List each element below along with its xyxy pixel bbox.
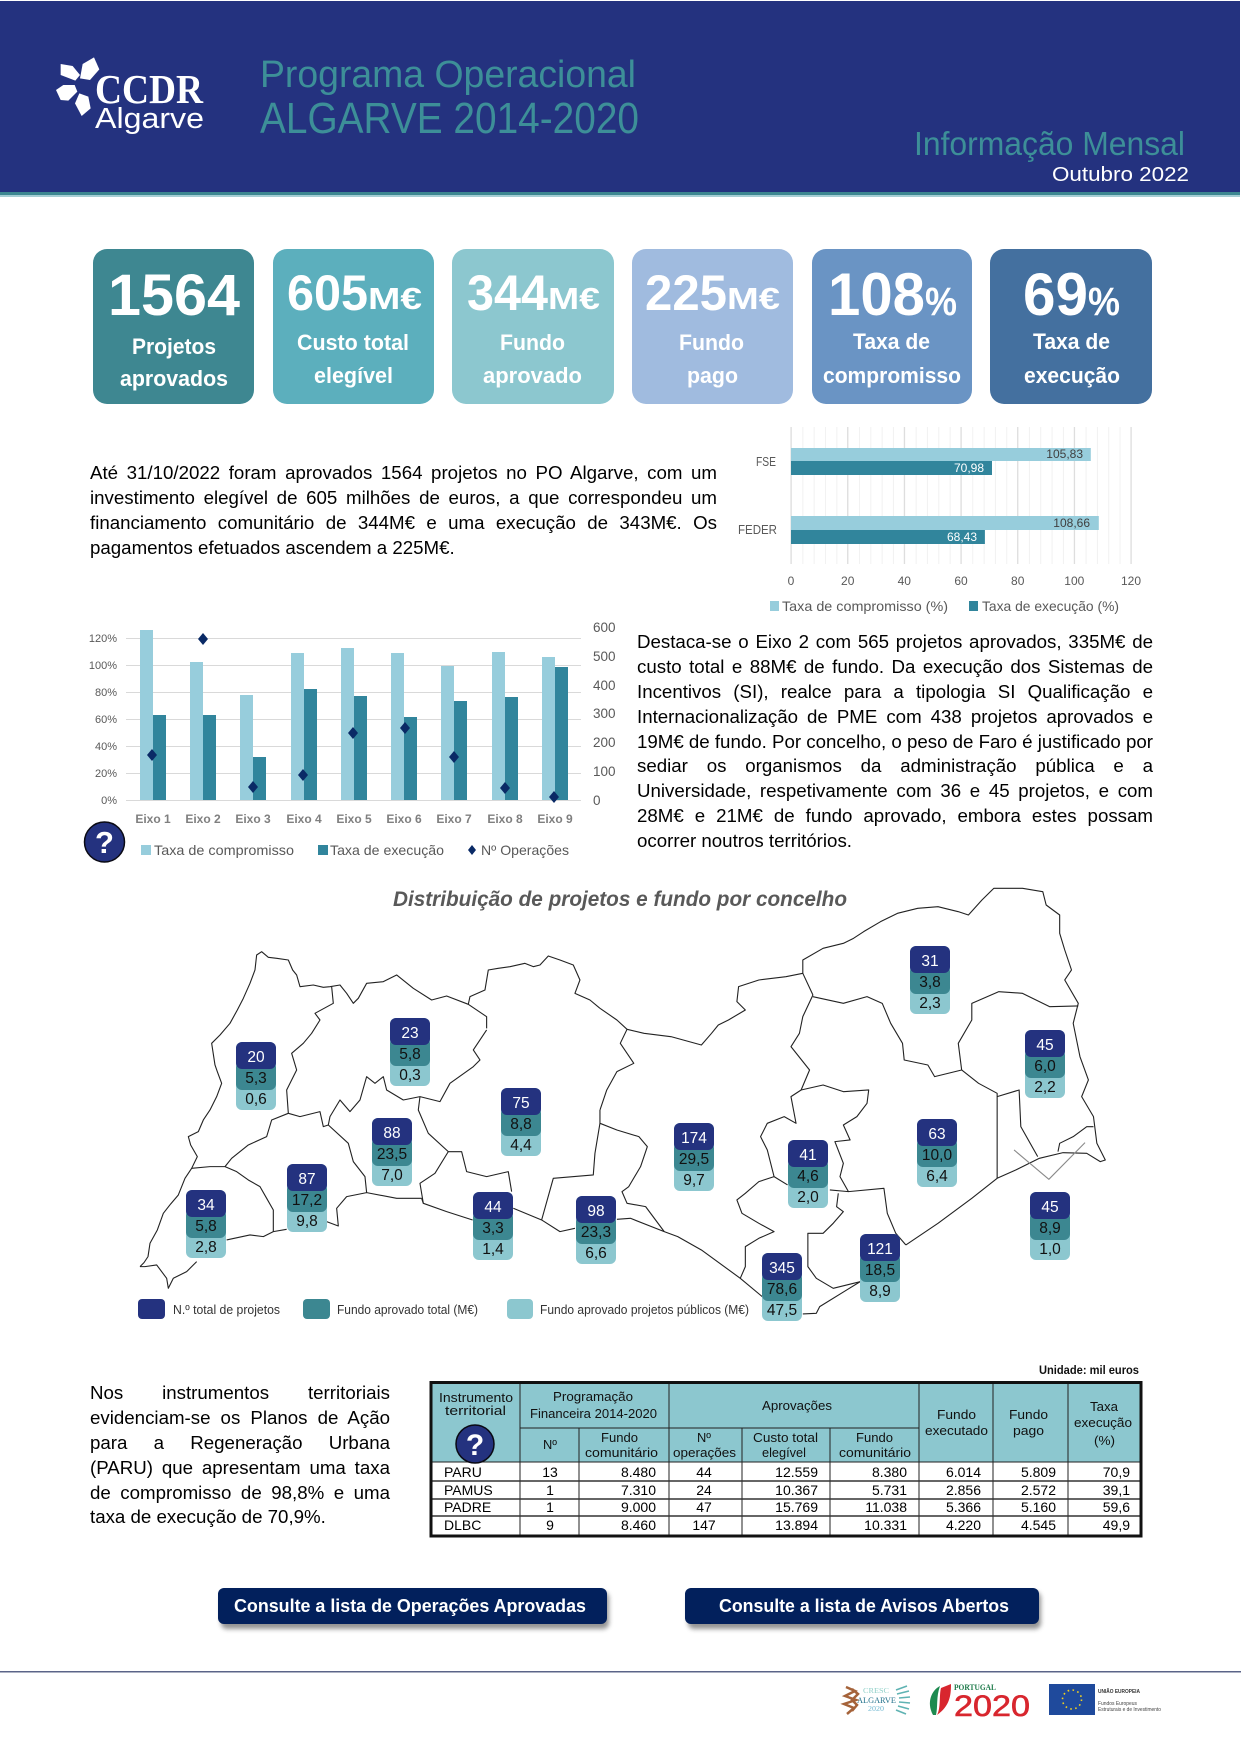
stack: 87: 9,8 [296, 1213, 318, 1230]
stack: 98: 98 [587, 1203, 605, 1220]
table row: PAMUS: 7.310 [621, 1482, 656, 1498]
footer logo: União Europeia [1049, 1684, 1161, 1715]
footer logo: Portugal 2020 [930, 1683, 1030, 1723]
card: taxa de execução: Taxa de [1033, 329, 1110, 354]
stack: 87 [287, 1164, 327, 1232]
category labels: Eixo 3 [235, 812, 271, 826]
stack: 23 [390, 1018, 430, 1086]
bars: FSE: 105,83 [1046, 447, 1083, 461]
table row: PARU: 8.480 [621, 1464, 656, 1480]
category labels: Eixo 5 [336, 812, 372, 826]
legend: Taxa de execução [330, 842, 444, 858]
table header: Financeira 2014-2020 [530, 1407, 657, 1421]
stack: 75: 75 [512, 1095, 530, 1112]
left axis: 20% [95, 768, 117, 780]
category labels: Eixo 6 [386, 812, 422, 826]
left axis: 80% [95, 687, 117, 699]
stack: 44: 3,3 [482, 1220, 504, 1237]
bars: FEDER: 68,43 [947, 530, 977, 544]
table header: comunitário [585, 1446, 658, 1460]
stack: 45 east: 2,2 [1034, 1079, 1056, 1096]
card: custo total elegível: elegível [314, 363, 393, 388]
stack: 23: 0,3 [399, 1067, 421, 1084]
category labels: Eixo 4 [286, 812, 322, 826]
card: fundo aprovado: M€ [548, 281, 600, 316]
table row: PADRE: 9.000 [621, 1499, 656, 1515]
stack: 98: 6,6 [585, 1245, 607, 1262]
text block: territorial instruments paragraph: Nos instrumentos territoriais [90, 1382, 390, 1403]
icon: question mark [84, 822, 124, 862]
stack: 63: 6,4 [926, 1168, 948, 1185]
legend [770, 598, 1119, 614]
table row: PAMUS: 2.856 [946, 1482, 981, 1498]
card: fundo pago: Fundo [679, 330, 744, 355]
heading: map title: Distribuição de projetos e fundo por concelho [393, 888, 847, 911]
table header: Fundo [937, 1408, 976, 1422]
table row: PADRE: 15.769 [775, 1499, 818, 1515]
right axis: 300 [593, 706, 616, 721]
stack: 34: 5,8 [195, 1218, 217, 1235]
table row: PARU: 12.559 [775, 1464, 818, 1480]
stack: 87: 87 [298, 1171, 316, 1188]
table header: Custo total [753, 1431, 818, 1445]
icon: CCDR Algarve logo: Algarve [95, 103, 204, 135]
stack: 174 [674, 1123, 714, 1191]
stack: 87: 17,2 [292, 1192, 322, 1209]
stack: 23: 23 [401, 1025, 419, 1042]
stack: 45 east [1025, 1030, 1065, 1098]
table row: PAMUS [444, 1482, 1130, 1498]
table header: Taxa [1090, 1400, 1118, 1414]
card: taxa de compromisso: Taxa de [853, 329, 930, 354]
text block: territorial instruments paragraph: para a Regeneração Urbana [90, 1432, 390, 1453]
icon: CCDR Algarve logo: CCDR [95, 66, 203, 112]
table row: PAMUS: 1 [546, 1482, 554, 1498]
card: taxa de execução: execução [1024, 363, 1120, 388]
axis labels: 60 [954, 574, 968, 588]
table row: PADRE: 59,6 [1103, 1499, 1130, 1515]
table row: PAMUS: 10.367 [775, 1482, 818, 1498]
text block: intro paragraph: financiamento comunitário de 344M€ e uma execução de 343M€. Os [90, 512, 717, 533]
card: taxa de compromisso [812, 249, 972, 404]
right axis: 500 [593, 649, 616, 664]
table header: Nº [543, 1438, 557, 1452]
card: taxa de execução: 69 [1023, 261, 1088, 328]
table header: Nº [697, 1431, 711, 1445]
stack: 63 [917, 1119, 957, 1187]
card: fundo pago: M€ [727, 281, 780, 316]
table row: PAMUS: 2.572 [1021, 1482, 1056, 1498]
stack: 20 [236, 1042, 276, 1110]
stack: 45 south [1030, 1192, 1070, 1260]
card: taxa de compromisso: 108 [828, 261, 925, 328]
table row: PAMUS: 39,1 [1103, 1482, 1130, 1498]
stack: 98: 23,3 [581, 1224, 611, 1241]
left axis: 0% [101, 795, 117, 807]
button: avisos abertos [685, 1588, 1041, 1629]
stack: 88: 23,5 [377, 1146, 407, 1163]
stack: 20: 0,6 [245, 1091, 267, 1108]
table header: executado [925, 1424, 988, 1438]
stack: 75: 8,8 [510, 1116, 532, 1133]
table row: DLBC: 9 [546, 1517, 554, 1533]
text block: territorial instruments paragraph: (PARU) que apresentam uma taxa [90, 1457, 390, 1478]
card: custo total elegível [273, 249, 434, 404]
stack: 174: 174 [681, 1130, 707, 1147]
stack: 45 east: 6,0 [1034, 1058, 1056, 1075]
category labels: Eixo 1 [135, 812, 171, 826]
text block: Eixo 2 highlight paragraph: Universidade, respetivamente com 36 e 45 projetos, e com [637, 780, 1153, 801]
panel: KPI cards [93, 249, 1152, 404]
card: fundo pago: pago [687, 363, 738, 388]
axis labels: 80 [1011, 574, 1025, 588]
card: projetos aprovados: Projetos [132, 334, 216, 359]
table row: DLBC: DLBC [444, 1517, 481, 1533]
text block: Eixo 2 highlight paragraph: Destaca-se o Eixo 2 com 565 projetos aprovados, 335M€ de [637, 631, 1153, 652]
table row: DLBC: 49,9 [1103, 1517, 1130, 1533]
map: Algarve municipalities [140, 888, 1105, 1314]
category labels: Eixo 8 [487, 812, 523, 826]
table header: Fundo [1009, 1408, 1048, 1422]
table row: PARU: 5.809 [1021, 1464, 1056, 1480]
table row: PARU: 70,9 [1103, 1464, 1130, 1480]
button: operações aprovadas: Consulte a lista de Operações Aprovadas [234, 1596, 586, 1616]
text block: territorial instruments paragraph [90, 1382, 390, 1527]
footer logo: Portugal 2020: PORTUGAL [954, 1683, 996, 1692]
stack: 345 [762, 1253, 802, 1321]
table row: PAMUS: 24 [696, 1482, 712, 1498]
bars: FEDER: 108,66 [1053, 516, 1090, 530]
footer logo: Cresc Algarve 2020 [844, 1686, 910, 1714]
icon: question mark: ? [95, 825, 114, 860]
table header: operações [673, 1446, 736, 1460]
text block: Eixo 2 highlight paragraph [637, 631, 1154, 851]
bar chart: taxa de compromisso e execução por fundo [738, 427, 1141, 614]
table header: comunitário [839, 1446, 911, 1460]
category labels [135, 812, 573, 826]
stack: 31: 2,3 [919, 995, 941, 1012]
footer logo: União Europeia: Fundos Europeus [1098, 1701, 1137, 1707]
stack: 20: 5,3 [245, 1070, 267, 1087]
map legend: Fundo aprovado projetos públicos (M€) [540, 1302, 749, 1317]
map legend [138, 1299, 749, 1319]
stack: 23: 5,8 [399, 1046, 421, 1063]
button: operações aprovadas [218, 1588, 609, 1629]
table header: Programação [553, 1390, 633, 1404]
bars: taxa de execução [153, 667, 568, 800]
stack: 121 [860, 1234, 900, 1302]
left axis: 120% [89, 633, 117, 645]
axis labels: 100 [1064, 574, 1085, 588]
text block: intro paragraph [90, 462, 717, 558]
category labels: Eixo 9 [537, 812, 573, 826]
card: taxa de execução: % [1088, 280, 1120, 324]
footer logo: Cresc Algarve 2020: ALGARVE [857, 1696, 896, 1705]
markers: nº operações [147, 633, 559, 803]
stack: 88 [372, 1118, 412, 1186]
table row: DLBC [444, 1517, 1130, 1533]
text block: intro paragraph: Até 31/10/2022 foram aprovados 1564 projetos no PO Algarve, com um [90, 462, 717, 483]
right axis [593, 620, 616, 808]
stack: 41 [788, 1140, 828, 1208]
axis labels: 20 [841, 574, 855, 588]
text block: Eixo 2 highlight paragraph: ocorrer noutros territórios. [637, 830, 852, 851]
stack: 45 south: 1,0 [1039, 1241, 1061, 1258]
table header: Aprovações [762, 1399, 832, 1413]
left axis: 100% [89, 660, 117, 672]
bars: FEDER [791, 516, 1099, 544]
stack: 45 south: 45 [1041, 1199, 1059, 1216]
table: territorial instruments [431, 1382, 1141, 1536]
left axis [89, 633, 117, 807]
legend [141, 842, 569, 858]
text block: Eixo 2 highlight paragraph: Internacionalização de PME com 438 projetos aprovados e [637, 706, 1153, 727]
stack: 41: 41 [799, 1147, 817, 1164]
stack: 34: 34 [197, 1197, 215, 1214]
table header: Fundo [856, 1431, 893, 1445]
text block: Eixo 2 highlight paragraph: 28M€ e 21M€ de fundo aprovado, embora estes possam [637, 805, 1153, 826]
table header: (%) [1094, 1434, 1115, 1448]
stack: 75: 4,4 [510, 1137, 532, 1154]
stack: 345: 47,5 [767, 1302, 797, 1319]
title [260, 54, 639, 143]
table row: PADRE: 5.160 [1021, 1499, 1056, 1515]
footer rule [0, 1671, 1241, 1672]
card: taxa de compromisso: % [925, 280, 957, 324]
stack: 345: 345 [769, 1260, 795, 1277]
stack: 98 [576, 1196, 616, 1264]
stack: 121: 121 [867, 1241, 893, 1258]
header banner [0, 1, 1240, 197]
bars: FSE [791, 447, 1091, 475]
left axis: 60% [95, 714, 117, 726]
stack: 31: 3,8 [919, 974, 941, 991]
table row: DLBC: 10.331 [864, 1517, 907, 1533]
table row: DLBC: 4.220 [946, 1517, 981, 1533]
map data stacks [186, 946, 1070, 1321]
stack: 31 [910, 946, 950, 1014]
axis labels [738, 454, 1141, 588]
table row: PAMUS: PAMUS [444, 1482, 493, 1498]
table row: PARU [444, 1464, 1130, 1480]
table row: PADRE: 1 [546, 1499, 554, 1515]
card: taxa de execução [990, 249, 1152, 404]
legend: Taxa de compromisso (%) [782, 598, 948, 614]
text block: Eixo 2 highlight paragraph: Incentivos (SI), realce para a tipologia SI Qualificação e [637, 681, 1153, 702]
text block: Eixo 2 highlight paragraph: sediar os organismos da administração pública e a [637, 755, 1153, 776]
table row: PARU: 13 [542, 1464, 558, 1480]
map legend: N.º total de projetos [173, 1302, 280, 1317]
stack: 88: 88 [383, 1125, 401, 1142]
stack: 45 east: 45 [1036, 1037, 1054, 1054]
right axis: 400 [593, 678, 616, 693]
bars: taxa de compromisso [140, 630, 555, 800]
footer logo: Cresc Algarve 2020: 2020 [868, 1705, 885, 1713]
card: fundo pago: 225 [645, 265, 727, 321]
right axis: 100 [593, 764, 616, 779]
stack: 121: 18,5 [865, 1262, 895, 1279]
table row: DLBC: 147 [692, 1517, 716, 1533]
table header: elegível [762, 1446, 806, 1460]
text block: territorial instruments paragraph: de compromisso de 98,8% e uma [90, 1482, 390, 1503]
table row: PADRE: 47 [696, 1499, 712, 1515]
axis labels: FEDER [738, 522, 777, 537]
stack: 44 [473, 1192, 513, 1260]
text block: territorial instruments paragraph: evidenciam-se os Planos de Ação [90, 1407, 390, 1428]
table row: PADRE: 11.038 [865, 1499, 907, 1515]
axis labels: 40 [898, 574, 911, 588]
card: fundo aprovado [452, 249, 614, 404]
stack: 174: 29,5 [679, 1151, 709, 1168]
table row: DLBC: 13.894 [775, 1517, 818, 1533]
stack: 174: 9,7 [683, 1172, 705, 1189]
right axis: 600 [593, 620, 616, 635]
right axis: 0 [593, 793, 601, 808]
icon: question mark [456, 1425, 494, 1463]
stack: 34 [186, 1190, 226, 1258]
subtitle: monthly information: Outubro 2022 [1052, 164, 1189, 186]
stack: 121: 8,9 [869, 1283, 891, 1300]
stack: 75 [501, 1088, 541, 1156]
card: fundo aprovado: 344 [467, 265, 548, 321]
text block: Eixo 2 highlight paragraph: custo total e 88M€ de fundo. Da execução dos Sistemas de [637, 656, 1153, 677]
text block: intro paragraph: investimento elegível de 605 milhões de euros, a que correspondeu um [90, 487, 717, 508]
footer logo: Cresc Algarve 2020: CRESC [863, 1687, 889, 1695]
unit note: Unidade: mil euros [1039, 1365, 1139, 1377]
stack: 88: 7,0 [381, 1167, 403, 1184]
table row: PADRE: PADRE [444, 1499, 491, 1515]
card: fundo pago [632, 249, 793, 404]
table header [439, 1390, 1132, 1460]
button: avisos abertos: Consulte a lista de Avisos Abertos [719, 1596, 1009, 1616]
category labels: Eixo 2 [185, 812, 221, 826]
text block: territorial instruments paragraph: taxa de execução de 70,9%. [90, 1506, 326, 1527]
table row: PARU: 6.014 [946, 1464, 981, 1480]
table header: execução [1074, 1416, 1132, 1430]
stack: 63: 10,0 [922, 1147, 952, 1164]
category labels: Eixo 7 [436, 812, 472, 826]
table header: pago [1013, 1424, 1044, 1438]
table row: DLBC: 8.460 [621, 1517, 656, 1533]
stack: 345: 78,6 [767, 1281, 797, 1298]
card: custo total elegível: 605 [287, 265, 368, 321]
stack: 44: 1,4 [482, 1241, 504, 1258]
table row: PARU: PARU [444, 1464, 482, 1480]
card: projetos aprovados: aprovados [120, 366, 228, 391]
stack: 63: 63 [928, 1126, 946, 1143]
card: fundo aprovado: aprovado [483, 363, 582, 388]
card: custo total elegível: Custo total [297, 330, 409, 355]
text block: Eixo 2 highlight paragraph: 19M€ de fundo. Por concelho, o peso de Faro é justificado por [637, 731, 1153, 752]
table header: territorial [445, 1404, 506, 1418]
right axis: 200 [593, 735, 616, 750]
subtitle: monthly information [914, 125, 1189, 186]
stack: 20: 20 [247, 1049, 265, 1066]
stack: 41: 4,6 [797, 1168, 819, 1185]
legend: Taxa de execução (%) [982, 598, 1119, 614]
text block: intro paragraph: pagamentos efetuados ascendem a 225M€. [90, 537, 455, 558]
legend: Taxa de compromisso [154, 842, 294, 858]
map legend: Fundo aprovado total (M€) [337, 1302, 478, 1317]
stack: 34: 2,8 [195, 1239, 217, 1256]
table row: DLBC: 4.545 [1021, 1517, 1056, 1533]
stack: 45 south: 8,9 [1039, 1220, 1061, 1237]
card: taxa de compromisso: compromisso [823, 363, 961, 388]
combo chart: eixos [84, 620, 616, 862]
table row: PARU: 44 [696, 1464, 712, 1480]
title: Programa Operacional [260, 54, 636, 96]
table header: Fundo [601, 1431, 638, 1445]
table header: Instrumento [439, 1391, 513, 1405]
axis labels: 0 [788, 574, 795, 588]
table row: PADRE [444, 1499, 1130, 1515]
subtitle: monthly information: Informação Mensal [914, 125, 1185, 162]
card: custo total elegível: M€ [368, 281, 422, 316]
footer logo: União Europeia: Estruturais e de Investimento [1098, 1707, 1161, 1713]
legend: Nº Operações [481, 842, 569, 858]
table row: PAMUS: 5.731 [872, 1482, 907, 1498]
table row: PADRE: 5.366 [946, 1499, 981, 1515]
axis labels: 120 [1121, 574, 1141, 588]
card: fundo aprovado: Fundo [500, 330, 565, 355]
stack: 31: 31 [921, 953, 939, 970]
bars: FSE: 70,98 [954, 461, 984, 475]
table row: PARU: 8.380 [872, 1464, 907, 1480]
left axis: 40% [95, 741, 117, 753]
axis labels: FSE [756, 454, 776, 469]
stack: 41: 2,0 [797, 1189, 819, 1206]
stack: 44: 44 [484, 1199, 502, 1216]
icon: CCDR Algarve logo [56, 57, 204, 135]
footer logo: Portugal 2020: 2020 [954, 1690, 1030, 1723]
icon: question mark: ? [466, 1429, 484, 1462]
card: projetos aprovados: 1564 [108, 263, 240, 328]
card: projetos aprovados [93, 249, 254, 404]
footer logo: União Europeia: UNIÃO EUROPEIA [1098, 1688, 1140, 1695]
title: ALGARVE 2014-2020 [260, 94, 639, 143]
